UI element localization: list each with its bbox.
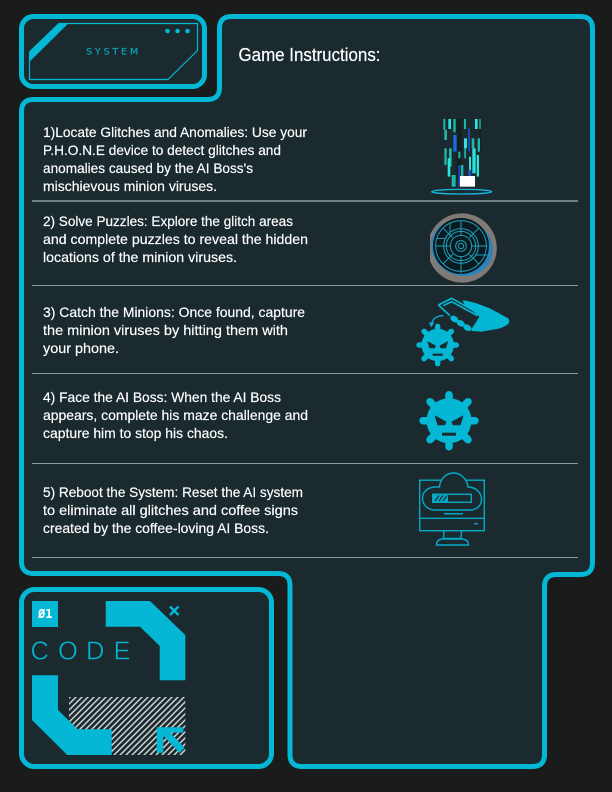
- icon: AI boss virus: [423, 395, 475, 447]
- step 2 text: and complete puzzles to reveal the hidden: [43, 231, 308, 247]
- fingers: [449, 314, 473, 332]
- step 3 text: [43, 304, 305, 356]
- badge label: SYSTEM: [86, 46, 141, 58]
- step 5 text: to eliminate all glitches and coffee signs: [43, 502, 298, 518]
- code label: CODE: [30, 638, 131, 666]
- badge 01: [32, 601, 58, 627]
- dividers: [32, 201, 578, 558]
- step 3 text: the minion viruses by hitting them with: [43, 322, 288, 338]
- icon: circuit lens: [422, 210, 502, 285]
- step 3 text: your phone.: [43, 340, 119, 356]
- step 1 text: [43, 124, 307, 194]
- step 2 text: 2) Solve Puzzles: Explore the glitch areas: [43, 213, 293, 229]
- panel: code: Ø1: [37, 607, 52, 621]
- step 1 text: anomalies caused by the AI Boss's: [43, 160, 253, 176]
- step 5 text: created by the coffee-loving AI Boss.: [43, 520, 269, 536]
- small virus: [419, 326, 456, 364]
- close mark: [170, 606, 178, 615]
- panel: system badge: [22, 16, 204, 86]
- phone: [438, 298, 482, 330]
- arrow: [429, 316, 443, 327]
- step 1 text: 1)Locate Glitches and Anomalies: Use your: [43, 124, 307, 140]
- step 5 text: [43, 484, 303, 536]
- step 3 text: 3) Catch the Minions: Once found, capture: [43, 304, 305, 320]
- arrow: [157, 727, 184, 753]
- step 2 text: [43, 213, 308, 265]
- step 5 text: 5) Reboot the System: Reset the AI system: [43, 484, 303, 500]
- icon: hand with phone hitting virus: [419, 298, 509, 364]
- bottom-left bracket: [32, 675, 112, 755]
- step 4 text: appears, complete his maze challenge and: [43, 407, 308, 423]
- heading: Game Instructions:: [238, 45, 380, 65]
- panel: code: [22, 590, 272, 766]
- icon: glitch pillar: [432, 119, 492, 194]
- hand: [463, 300, 509, 332]
- hatch area: [69, 697, 185, 755]
- icon: monitor with cloud: [420, 473, 484, 545]
- step 4 text: 4) Face the AI Boss: When the AI Boss: [43, 389, 281, 405]
- step 4 text: capture him to stop his chaos.: [43, 425, 228, 441]
- step 1 text: mischievous minion viruses.: [43, 178, 217, 194]
- step 2 text: locations of the minion viruses.: [43, 249, 237, 265]
- step 1 text: P.H.O.N.E device to detect glitches and: [43, 142, 281, 158]
- step 4 text: [43, 389, 308, 441]
- top-right bracket: [106, 601, 185, 680]
